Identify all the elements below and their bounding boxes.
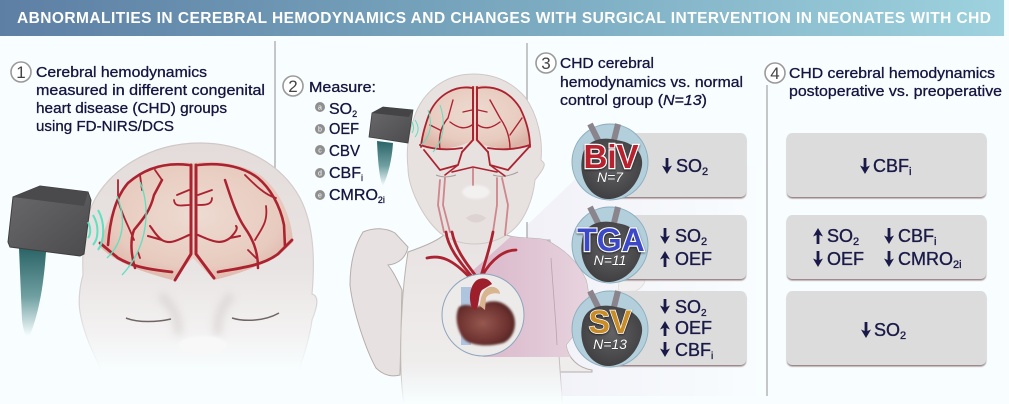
- divider lines: [275, 41, 767, 396]
- TGA heart badge: TGA: [577, 222, 645, 258]
- BiV heart badge: N=7: [597, 169, 624, 185]
- face: [126, 295, 279, 354]
- section 3 background tint: [527, 165, 765, 396]
- measure list: [315, 101, 385, 205]
- heading text 1: Cerebral hemodynamics: [36, 64, 207, 81]
- icon: NIRS device on head small: [369, 105, 443, 186]
- BiV heart badge: BiV: [583, 138, 639, 175]
- chest arteries: [427, 232, 516, 280]
- SV result box: [600, 291, 746, 365]
- panel: section 3 CHD vs control: [536, 53, 746, 367]
- neck and face vessels: [438, 168, 508, 235]
- device tail: [377, 141, 393, 186]
- measure list: i: [361, 173, 363, 183]
- heading text 4: CHD cerebral hemodynamics: [789, 65, 995, 82]
- measure list: c: [318, 148, 322, 154]
- TGA result box: 2: [701, 236, 707, 248]
- illustration: infant head with brain vessels: [79, 143, 317, 372]
- brain: [100, 162, 293, 280]
- brain vessels: [100, 164, 292, 280]
- SV result box: i: [711, 351, 713, 362]
- infant right arm: [546, 240, 592, 372]
- number badge 2: [283, 76, 303, 96]
- panel: section 2 measures: [283, 76, 385, 205]
- face features: [436, 172, 518, 222]
- result box CBFi: i: [909, 166, 911, 178]
- SV heart badge: N=13: [593, 336, 627, 352]
- result box SO2: 2: [900, 330, 906, 342]
- TGA result box: SO: [675, 226, 701, 246]
- signal waves: [88, 182, 146, 275]
- result box four measures: i: [934, 236, 936, 248]
- title banner: ABNORMALITIES IN CEREBRAL HEMODYNAMICS AND CHANGES WITH SURGICAL INTERVENTION IN NEONATES WITH CHD: [17, 10, 991, 27]
- infant left arm: [350, 229, 408, 376]
- BiV result box: [600, 133, 746, 197]
- BiV result box: 2: [702, 166, 708, 178]
- measure list: CMRO: [329, 187, 378, 204]
- heading text 1: using FD-NIRS/DCS: [36, 118, 174, 135]
- SV heart badge: [572, 291, 648, 367]
- result box four measures: SO: [827, 226, 853, 246]
- measure list: SO: [329, 101, 352, 118]
- device tail: [19, 248, 46, 336]
- number badge 4: [765, 63, 785, 83]
- heading text 4: [789, 65, 1002, 100]
- measure list: e: [318, 192, 322, 200]
- heading text 1: measured in different congenital: [36, 82, 265, 99]
- TGA heart badge: N=11: [594, 252, 626, 268]
- TGA heart badge: [572, 207, 648, 283]
- pink chest panel: [470, 236, 588, 357]
- BiV heart badge: [572, 124, 648, 200]
- icon: NIRS device on head: [8, 182, 146, 336]
- panel: section 4 postoperative vs preoperative: 4: [770, 64, 780, 83]
- torso edge over pink: [551, 258, 557, 345]
- brain: [420, 85, 530, 148]
- SV result box: OEF: [675, 318, 712, 338]
- BiV result box: SO: [676, 156, 702, 176]
- result box four measures: [787, 215, 986, 279]
- heading text 1: [36, 64, 265, 135]
- measure list: CBV: [329, 143, 360, 160]
- signal waves: [412, 105, 443, 152]
- result box four measures: CMRO: [898, 249, 953, 269]
- heading text 3: CHD cerebral: [560, 55, 654, 72]
- result box four measures: 2: [853, 236, 859, 248]
- result box four measures: 2i: [953, 259, 962, 271]
- heading text 2: Measure:: [309, 79, 376, 96]
- device box: [8, 186, 91, 256]
- brain vessels: [420, 87, 530, 176]
- SV result box: 2: [701, 308, 707, 319]
- result box four measures: OEF: [827, 249, 864, 269]
- measure list: 2: [352, 109, 357, 119]
- result box SO2: [787, 291, 986, 365]
- icon: heart: [457, 278, 515, 345]
- number badge 1: [11, 62, 31, 82]
- heading text 3: control group ( N=13): [560, 92, 707, 109]
- measure list: d: [318, 170, 322, 178]
- panel: section 4 postoperative vs preoperative: [765, 63, 1002, 365]
- SV heart badge: SV: [589, 304, 632, 340]
- heading text 1: heart disease (CHD) groups: [36, 100, 227, 117]
- heart inset circle: [442, 274, 524, 356]
- SV result box: SO: [675, 297, 701, 317]
- TGA result box: OEF: [675, 249, 712, 269]
- measure list: a: [318, 104, 322, 112]
- heading text 4: postoperative vs. preoperative: [789, 83, 1002, 100]
- heading text 3: [560, 55, 743, 109]
- heading text 3: hemodynamics vs. normal: [560, 74, 743, 91]
- panel: section 1 heading: [11, 62, 265, 135]
- measure list: CBF: [329, 165, 361, 182]
- infant torso: [401, 232, 562, 404]
- SV result box: CBF: [675, 340, 711, 360]
- number badge 3: [536, 53, 556, 73]
- pale hand between boxes: [618, 270, 645, 292]
- head shape: [79, 143, 317, 372]
- result box CBFi: [787, 133, 986, 197]
- panel: section 3 CHD vs control: 3: [541, 54, 551, 73]
- panel: section 1 heading: 1: [16, 63, 26, 82]
- illustration: infant with heart and cerebral vessels: [350, 74, 600, 404]
- result box four measures: CBF: [898, 226, 934, 246]
- head shape: [407, 74, 544, 244]
- device box: [369, 107, 413, 143]
- result box SO2: SO: [874, 320, 900, 340]
- title banner: [0, 0, 1004, 36]
- TGA result box: [600, 215, 746, 279]
- panel: section 2 measures: 2: [288, 77, 298, 96]
- result box CBFi: CBF: [873, 156, 909, 176]
- measure list: b: [318, 126, 322, 134]
- measure list: OEF: [329, 121, 359, 138]
- measure list: 2i: [378, 195, 385, 205]
